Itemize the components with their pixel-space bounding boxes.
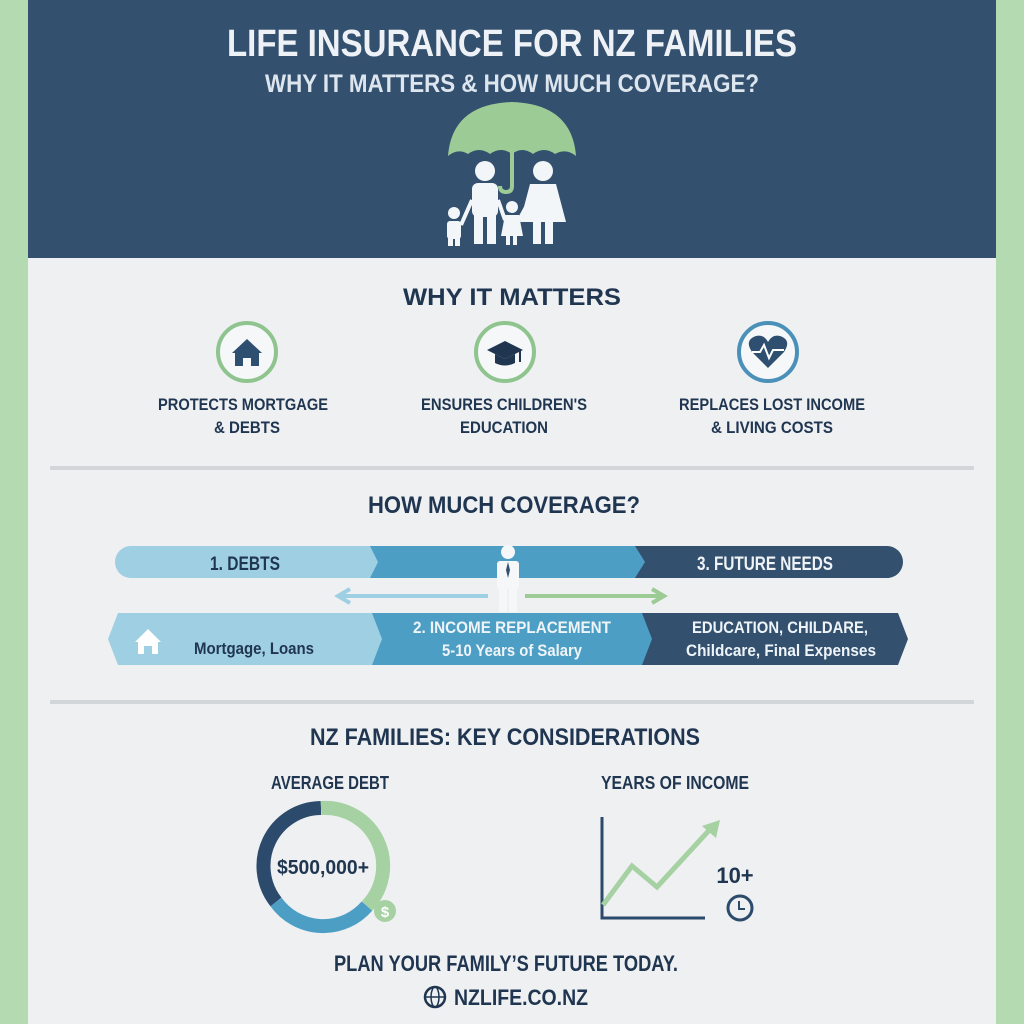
header xyxy=(28,0,996,258)
title: LIFE INSURANCE FOR NZ FAMILIES xyxy=(227,23,797,65)
chart: coverage bars: 2. INCOME REPLACEMENT xyxy=(413,618,612,637)
chart: coverage bars: Childcare, Final Expenses xyxy=(686,641,876,660)
icon: umbrella family xyxy=(447,102,576,246)
subtitle: WHY IT MATTERS & HOW MUCH COVERAGE? xyxy=(265,70,759,98)
panel: education: ENSURES CHILDREN'S xyxy=(421,395,587,414)
footer text: PLAN YOUR FAMILY’S FUTURE TODAY. xyxy=(334,951,678,976)
panel: mortgage: PROTECTS MORTGAGE xyxy=(158,395,328,414)
panel: income: REPLACES LOST INCOME xyxy=(679,395,865,414)
chart: donut average debt: $500,000+ xyxy=(277,857,369,879)
heading: why it matters: WHY IT MATTERS xyxy=(403,284,621,311)
panel: income xyxy=(679,323,865,437)
heading: key considerations: NZ FAMILIES: KEY CONSIDERATIONS xyxy=(310,724,700,751)
heading: how much coverage: HOW MUCH COVERAGE? xyxy=(368,492,640,519)
arrow: right xyxy=(525,589,664,603)
chart: years of income: 10+ xyxy=(716,863,754,888)
panel: mortgage xyxy=(158,323,328,437)
icon: person xyxy=(497,545,519,612)
panel: mortgage: & DEBTS xyxy=(214,418,280,437)
chart: coverage bars: 5-10 Years of Salary xyxy=(442,641,582,660)
chart: coverage bars: 1. DEBTS xyxy=(210,554,280,575)
chart: coverage bars: EDUCATION, CHILDARE, xyxy=(692,618,868,637)
panel: education xyxy=(421,323,587,437)
chart: years of income xyxy=(601,773,754,920)
chart: years of income: YEARS OF INCOME xyxy=(601,773,749,793)
chart: coverage bars: Mortgage, Loans xyxy=(194,639,314,658)
panel: education: EDUCATION xyxy=(460,418,548,437)
chart: donut average debt: $ xyxy=(381,904,390,921)
panel: income: & LIVING COSTS xyxy=(711,418,833,437)
chart: donut average debt: AVERAGE DEBT xyxy=(271,773,389,793)
chart: coverage bars xyxy=(108,546,908,665)
icon: globe and url: NZLIFE.CO.NZ xyxy=(454,985,588,1010)
chart: coverage bars: 3. FUTURE NEEDS xyxy=(697,554,833,575)
arrow: left xyxy=(338,589,488,603)
chart: donut average debt xyxy=(263,773,396,926)
